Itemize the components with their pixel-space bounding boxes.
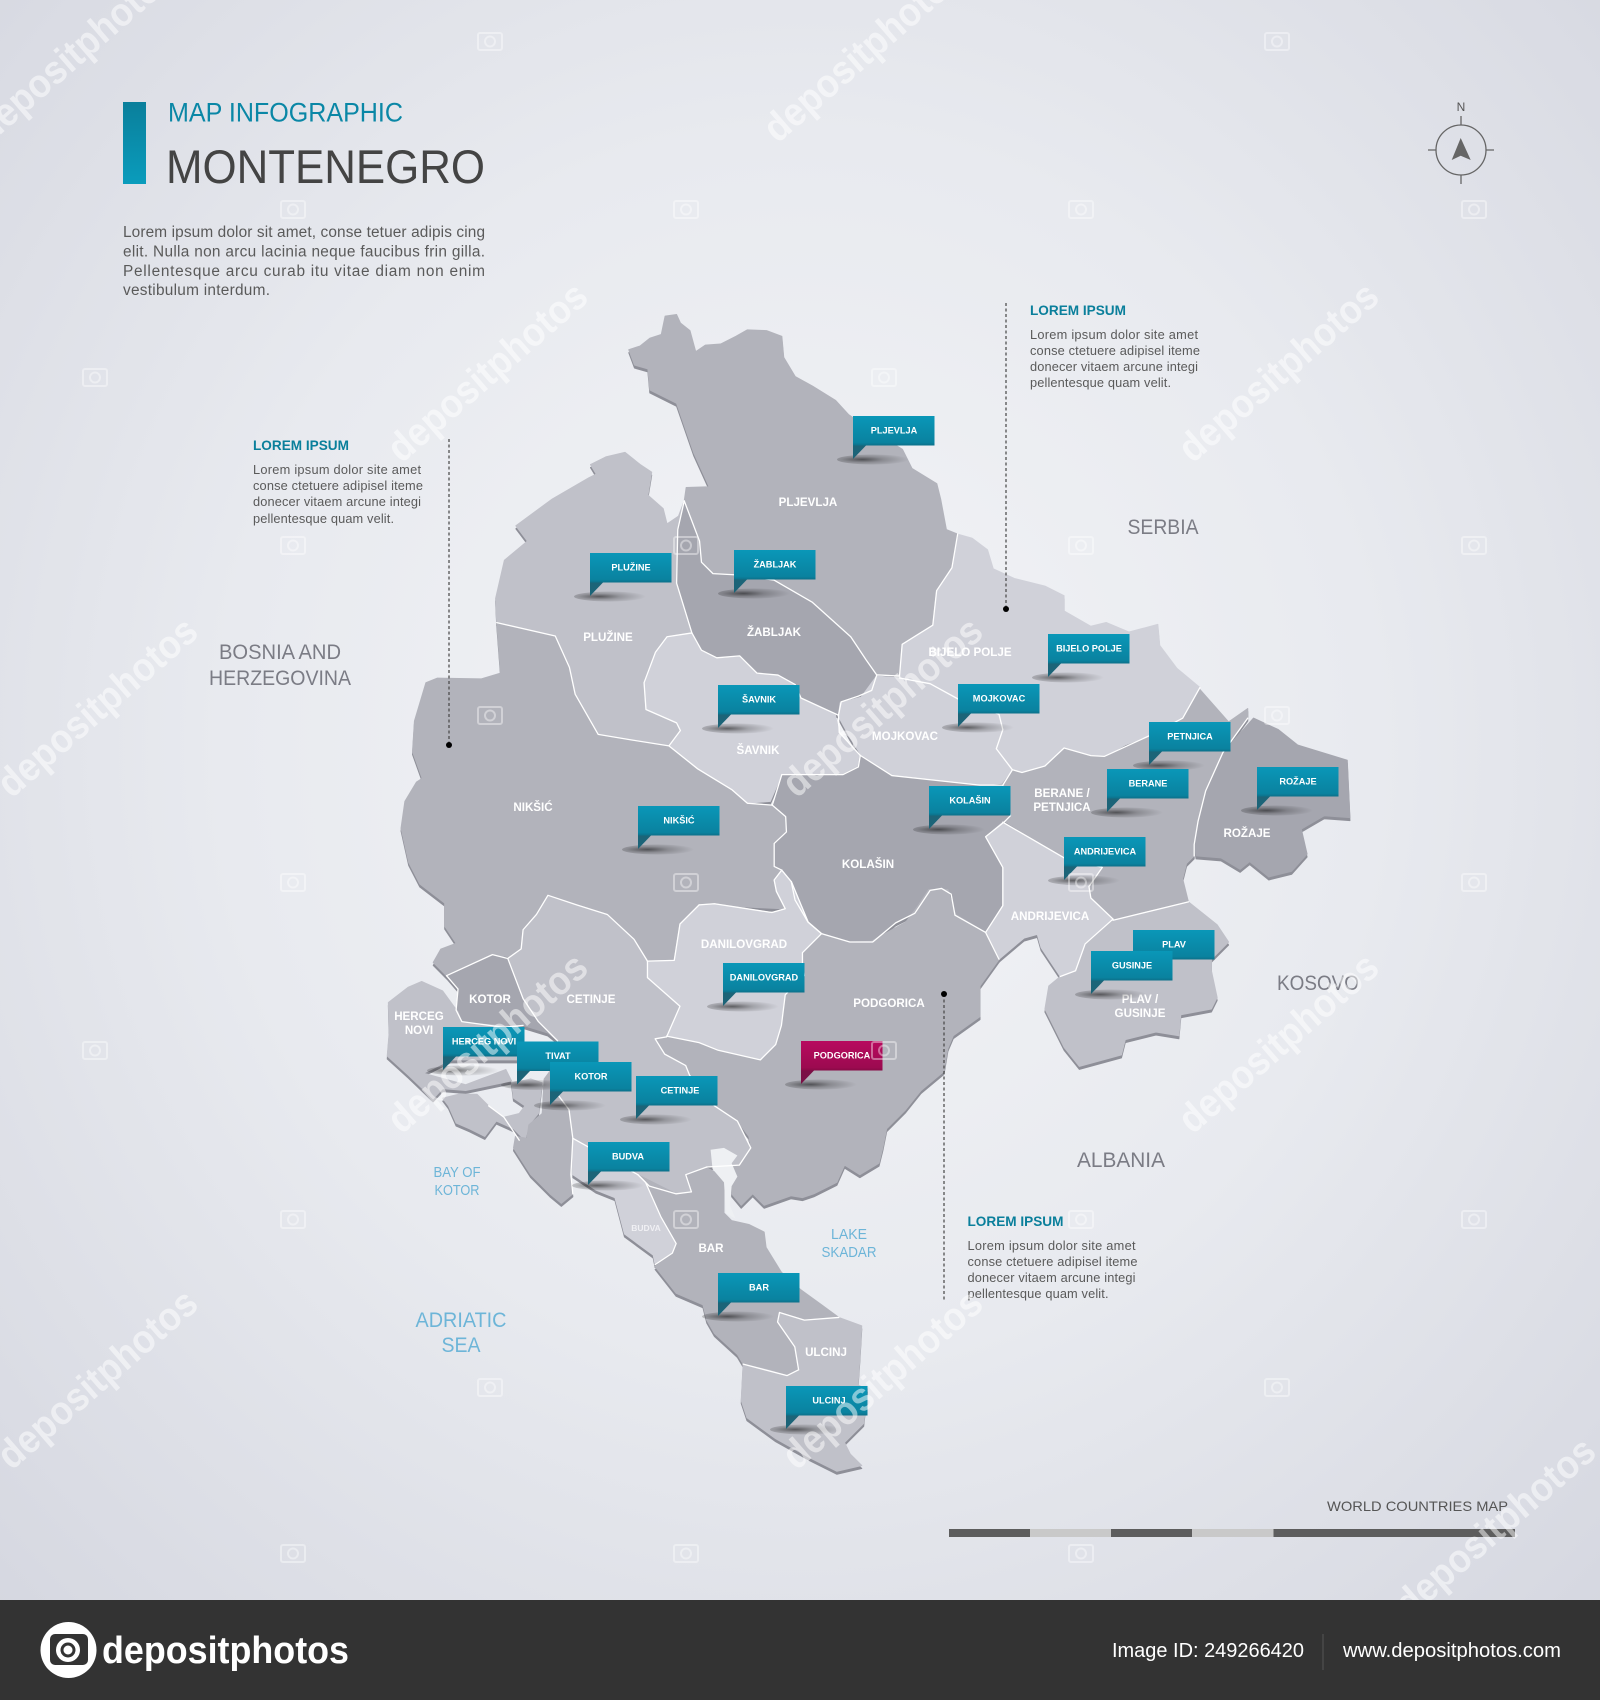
footer image id: Image ID: 249266420 [1112, 1640, 1304, 1662]
map region labels: CETINJE [567, 993, 616, 1006]
tag: Danilovgrad: DANILOVGRAD [730, 972, 799, 982]
region: Andrijevica [986, 822, 1113, 976]
tag: Andrijevica [1048, 837, 1146, 886]
region: Budva [573, 1138, 676, 1265]
tag: Plav [1133, 930, 1214, 960]
region: coastal Tivat strip [514, 1071, 573, 1203]
tag: Kolašin [913, 786, 1010, 834]
sea label: Lake Skadar: LAKE [831, 1227, 867, 1243]
tag: Cetinje [620, 1076, 718, 1124]
callout: bottom right: pellentesque quam velit. [968, 1286, 1108, 1301]
tag: Herceg Novi: HERCEG NOVI [452, 1036, 516, 1046]
tag: Bar: BAR [749, 1282, 769, 1292]
watermarks: depositphotos [774, 609, 991, 806]
footer logo icon [40, 1622, 96, 1678]
region: Pljevlja [629, 315, 958, 675]
tag: Berane [1091, 769, 1188, 818]
sea label: Adriatic Sea: ADRIATIC [416, 1308, 506, 1332]
tag: Bar [702, 1273, 800, 1322]
map region labels: PLUŽINE [583, 631, 633, 644]
footer divider [1322, 1634, 1324, 1670]
region: Kotor [447, 955, 558, 1041]
compass [1428, 100, 1494, 184]
country label: Albania: ALBANIA [1077, 1149, 1165, 1172]
intro paragraph [123, 224, 485, 299]
sea label: Bay of Kotor: KOTOR [434, 1183, 480, 1199]
callout: top right: LOREM IPSUM [1030, 303, 1126, 318]
callout: bottom right: LOREM IPSUM [968, 1214, 1063, 1229]
callout: bottom right: Lorem ipsum dolor site amet [968, 1238, 1136, 1253]
tag: Pljevlja [837, 416, 934, 464]
tag: Kotor [534, 1062, 632, 1110]
region: Žabljak [677, 501, 877, 715]
callout: left: LOREM IPSUM [253, 438, 349, 453]
footer url: www.depositphotos.com [1342, 1640, 1561, 1662]
map region labels: ŽABLJAK [747, 626, 802, 639]
region: Ulcinj [741, 1312, 868, 1471]
callout: left: conse ctetuere adipisel iteme [253, 478, 423, 493]
callout: bottom right: conse ctetuere adipisel iteme [968, 1254, 1138, 1269]
region: Rožaje [1194, 718, 1350, 877]
watermarks: depositphotos [379, 274, 596, 471]
tag: Žabljak: ŽABLJAK [754, 558, 797, 570]
title accent bar [123, 102, 146, 184]
sea label: Lake Skadar [822, 1227, 876, 1261]
tag: Berane: BERANE [1129, 778, 1167, 788]
region: Herceg Novi [387, 981, 519, 1099]
sea label: Adriatic Sea: SEA [442, 1333, 481, 1357]
map region labels: KOTOR [469, 993, 511, 1006]
tag: Rožaje: ROŽAJE [1279, 776, 1317, 786]
map region labels: GUSINJE [1115, 1007, 1166, 1020]
tag: Rožaje [1241, 767, 1338, 816]
map of Montenegro [387, 315, 1350, 1471]
map region labels: PETNJICA [1033, 801, 1091, 814]
map region labels: BIJELO POLJE [928, 646, 1012, 659]
region: Bijelo Polje [900, 534, 1200, 772]
map region labels: DANILOVGRAD [701, 938, 787, 951]
region: Cetinje [508, 895, 751, 1194]
region: Berane / Petnjica [1003, 689, 1248, 919]
callout: top right: Lorem ipsum dolor site amet [1030, 327, 1198, 342]
tag: Mojkovac: MOJKOVAC [973, 694, 1026, 704]
map region labels: HERCEG [394, 1010, 444, 1023]
tag: Petnjica [1133, 722, 1230, 770]
intro paragraph: vestibulum interdum. [123, 282, 270, 299]
tag: Plužine [574, 553, 672, 602]
region: Luštica peninsula [443, 1079, 542, 1140]
region: Nikšić [401, 623, 786, 976]
region: Plužine [496, 452, 692, 746]
callout: left: pellentesque quam velit. [253, 511, 394, 526]
watermarks: depositphotos [774, 1281, 991, 1478]
region: Plav / Gusinje [1045, 902, 1229, 1066]
region: Bar [638, 1168, 839, 1376]
region: Kolašin [772, 755, 1010, 942]
tag: Budva: BUDVA [612, 1152, 644, 1162]
tag: Ulcinj: ULCINJ [812, 1396, 846, 1406]
map region labels: BERANE / [1034, 787, 1090, 800]
tag: Bijelo Polje: BIJELO POLJE [1056, 644, 1122, 654]
watermarks: depositphotos [379, 945, 596, 1142]
map region labels: NIKŠIĆ [513, 801, 553, 814]
footer bar [0, 1600, 1600, 1700]
map region labels: PLJEVLJA [779, 496, 838, 509]
callout: left: Lorem ipsum dolor site amet [253, 462, 421, 477]
callout: top right [1003, 303, 1200, 612]
callout: top right: pellentesque quam velit. [1030, 375, 1171, 390]
tag: Kolašin: KOLAŠIN [949, 794, 991, 806]
map region labels: PLAV / [1122, 993, 1159, 1006]
subtitle: MAP INFOGRAPHIC [168, 98, 403, 128]
tag: Andrijevica: ANDRIJEVICA [1074, 846, 1137, 856]
tag: Tivat [501, 1042, 598, 1090]
map region labels: ŠAVNIK [737, 744, 780, 757]
Lake Skadar inlet [711, 1148, 737, 1219]
title: MONTENEGRO [166, 141, 485, 194]
tag: Ulcinj [770, 1386, 868, 1434]
intro paragraph: elit. Nulla non arcu lacinia neque faucibus frin gilla. [123, 244, 485, 260]
tag: Danilovgrad [707, 963, 804, 1012]
tag: Bijelo Polje [1032, 634, 1130, 682]
tag: Plužine: PLUŽINE [611, 562, 651, 572]
region: Podgorica [655, 890, 999, 1205]
intro paragraph: Lorem ipsum dolor sit amet, conse tetuer adipis cing [123, 224, 485, 241]
map region labels: PODGORICA [853, 997, 925, 1010]
tag: Žabljak [718, 550, 816, 598]
map region labels [394, 496, 1271, 1359]
tag: Pljevlja: PLJEVLJA [871, 426, 918, 436]
callout: bottom right: donecer vitaem arcune integi [968, 1270, 1136, 1285]
scale caption: WORLD COUNTRIES MAP [1327, 1498, 1508, 1514]
map region labels: BAR [698, 1242, 724, 1255]
tag: Plav: PLAV [1162, 940, 1187, 950]
tag: Kotor: KOTOR [574, 1072, 608, 1082]
sea label: Lake Skadar: SKADAR [822, 1245, 876, 1261]
callout: left [253, 438, 452, 748]
map region labels: ROŽAJE [1223, 827, 1271, 840]
sea label: Adriatic Sea [416, 1308, 506, 1357]
tag: Nikšić [622, 806, 720, 854]
country label: Bosnia and Herzegovina: BOSNIA AND [219, 641, 341, 664]
country label: Bosnia and Herzegovina: HERZEGOVINA [209, 667, 351, 690]
callout: bottom right [941, 991, 1138, 1301]
callout: top right: conse ctetuere adipisel iteme [1030, 343, 1200, 358]
country label: Serbia: SERBIA [1128, 516, 1198, 539]
watermarks: depositphotos [1170, 945, 1387, 1142]
tag: Cetinje: CETINJE [661, 1086, 699, 1096]
intro paragraph: Pellentesque arcu curab itu vitae diam non enim [123, 263, 485, 280]
tag: Gusinje: GUSINJE [1112, 960, 1152, 970]
map region labels: BUDVA [631, 1223, 661, 1233]
region: Šavnik [644, 633, 860, 803]
map region labels: ANDRIJEVICA [1011, 910, 1090, 923]
sea label: Bay of Kotor [434, 1165, 481, 1199]
tag: Gusinje [1075, 951, 1172, 1000]
scale bar [949, 1529, 1515, 1537]
tag: Mojkovac [942, 684, 1040, 732]
tag: Šavnik: ŠAVNIK [742, 694, 776, 704]
country label: Kosovo: KOSOVO [1277, 972, 1359, 995]
tag: Petnjica: PETNJICA [1167, 732, 1213, 742]
tag: Tivat: TIVAT [545, 1051, 571, 1061]
map region labels: KOLAŠIN [842, 858, 894, 871]
compass: N [1457, 100, 1465, 114]
sea label: Bay of Kotor: BAY OF [434, 1165, 481, 1181]
watermarks: depositphotos [1170, 274, 1387, 471]
region: Mojkovac [838, 676, 1012, 785]
country label: Bosnia and Herzegovina [209, 641, 351, 690]
footer logo text: depositphotos [102, 1630, 349, 1672]
tag: Herceg Novi [427, 1027, 524, 1076]
region: Danilovgrad [647, 870, 822, 1060]
tag: Podgorica (capital): PODGORICA [814, 1050, 871, 1060]
map region labels: ULCINJ [805, 1346, 847, 1359]
tag: Podgorica (capital) [785, 1041, 882, 1090]
callout: left: donecer vitaem arcune integi [253, 494, 421, 509]
map region labels: MOJKOVAC [872, 730, 939, 743]
callout: top right: donecer vitaem arcune integi [1030, 359, 1198, 374]
tag: Šavnik [702, 685, 800, 734]
tag: Nikšić: NIKŠIĆ [663, 814, 695, 826]
map region labels: NOVI [405, 1024, 433, 1037]
tag: Budva [572, 1142, 670, 1190]
